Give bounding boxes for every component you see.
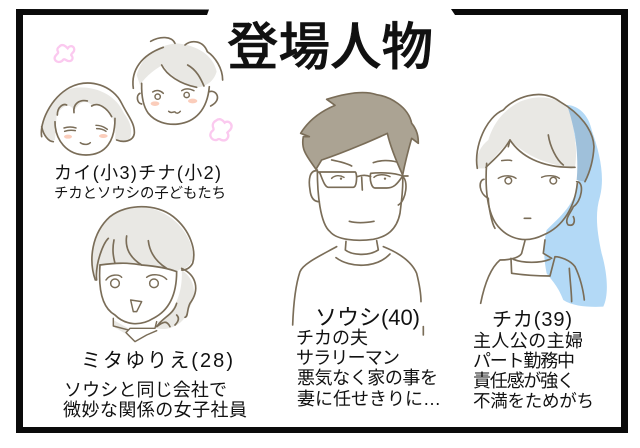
icon: pink flower left [55,45,74,62]
label: description [296,328,441,409]
label: names: カイ(小3)チナ(小2) [54,163,221,183]
label: description: チカの夫 [296,328,368,348]
illustration: boy face [133,38,223,124]
label: description: パート勤務中 [473,351,575,371]
character: Mita Yurie [63,207,247,420]
character: Chika [473,95,607,411]
label: description: サラリーマン [296,348,400,368]
label: description [63,380,247,420]
label: description: 主人公の主婦 [473,331,583,351]
character: Youshi [293,93,441,409]
character: China and Kai [41,38,232,202]
illustration: girl face [41,83,134,155]
illustration: Mita face [92,207,196,342]
label: name: チカ(39) [492,309,572,331]
label: name: ソウシ(40) [315,305,420,330]
label: description [473,331,594,411]
label: description: 不満をためがち [473,391,594,411]
label: description: チカとソウシの子どもたち [54,185,226,202]
title: 登場人物 [227,18,433,76]
illustration: Youshi bust [293,93,423,335]
label: description: 責任感が強く [473,371,575,391]
illustration: children [41,38,232,155]
illustration: Chika bust [476,95,607,307]
label: description: 悪気なく家の事を [297,368,438,388]
label: description: 妻に任せきりに… [297,389,441,409]
label: name: ミタゆりえ(28) [81,349,233,372]
label: description: ソウシと同じ会社で [64,380,227,400]
icon: pink flower right [210,119,232,140]
label: description: 微妙な関係の女子社員 [63,400,247,420]
